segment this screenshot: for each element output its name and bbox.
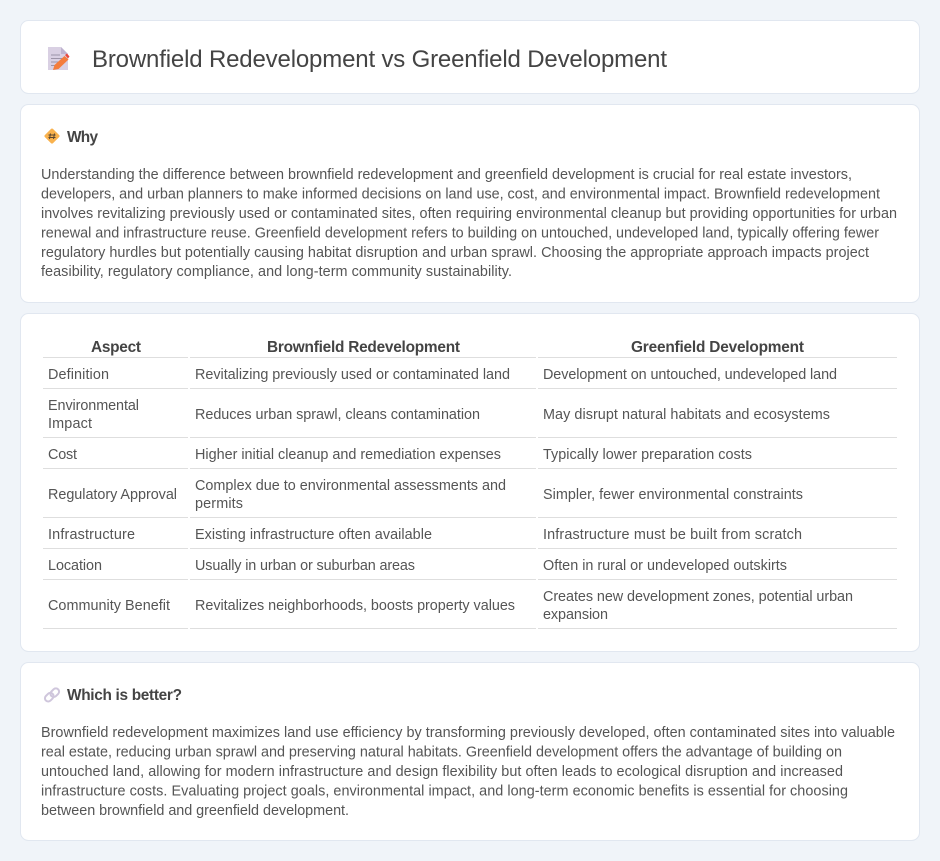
row: environmental impact: Impact <box>48 416 92 432</box>
table header <box>91 339 804 356</box>
row: community benefit <box>48 589 853 623</box>
text block: why paragraph: involves revitalizing previously used or contaminated sites, often requiring environmental cleanup but providing opportunities for urban <box>41 206 897 222</box>
panel: why <box>20 104 920 302</box>
row: infrastructure <box>48 527 802 543</box>
row: cost: Typically lower preparation costs <box>543 447 752 463</box>
row: regulatory approval: Complex due to environmental assessments and <box>195 478 506 494</box>
text block: why paragraph: Understanding the difference between brownfield redevelopment and greenfield development is crucial for real estate investors, <box>41 167 852 183</box>
row: location: Location <box>48 558 102 574</box>
row: definition: Definition <box>48 367 109 383</box>
heading: why: Why <box>67 129 98 146</box>
row: cost: Higher initial cleanup and remediation expenses <box>195 447 501 463</box>
text block: which is better paragraph: untouched land, allowing for modern infrastructure and design flexibility but often leads to ecological disruption and increased <box>41 764 843 780</box>
row: environmental impact: Environmental <box>48 398 139 414</box>
row: community benefit: Community Benefit <box>48 598 170 614</box>
text block: which is better paragraph: infrastructure costs. Evaluating project goals, environmental impact, and long-term economic benefits is essential for choosing <box>41 784 848 800</box>
row: environmental impact <box>48 398 830 432</box>
text block: which is better paragraph: between brownfield and greenfield development. <box>41 803 349 819</box>
text block: why paragraph: renewal and infrastructure reuse. Greenfield development refers to building on untouched, undeveloped land, typically offering fewer <box>41 226 879 242</box>
heading: which is better: Which is better? <box>67 687 182 704</box>
row: environmental impact: Reduces urban sprawl, cleans contamination <box>195 407 480 423</box>
row: community benefit: expansion <box>543 607 608 623</box>
row: regulatory approval: permits <box>195 496 243 512</box>
text block: which is better paragraph: Brownfield redevelopment maximizes land use efficiency by transforming previously developed, often contaminated sites into valuable <box>41 725 895 741</box>
title: Brownfield Redevelopment vs Greenfield Development <box>92 46 667 73</box>
row: community benefit: Revitalizes neighborhoods, boosts property values <box>195 598 515 614</box>
table header: Greenfield Development <box>631 339 804 356</box>
icon: link <box>44 687 60 703</box>
row: infrastructure: Infrastructure must be built from scratch <box>543 527 802 543</box>
row: definition: Revitalizing previously used or contaminated land <box>195 367 510 383</box>
row: infrastructure: Infrastructure <box>48 527 135 543</box>
icon: document with pencil <box>48 47 70 70</box>
row: location <box>48 558 787 574</box>
row: community benefit: Creates new development zones, potential urban <box>543 589 853 605</box>
icon: construction diamond <box>44 128 60 144</box>
panel: which is better <box>20 662 920 840</box>
row: environmental impact: May disrupt natural habitats and ecosystems <box>543 407 830 423</box>
row: location: Often in rural or undeveloped outskirts <box>543 558 787 574</box>
row: cost <box>48 447 752 463</box>
row: location: Usually in urban or suburban areas <box>195 558 415 574</box>
text block: which is better paragraph: real estate, reducing urban sprawl and preserving natural habitats. Greenfield development offers the advantage of building on <box>41 744 842 760</box>
row: regulatory approval: Simpler, fewer environmental constraints <box>543 487 803 503</box>
text block: which is better paragraph <box>41 725 895 819</box>
table header: Aspect <box>91 339 141 356</box>
row: cost: Cost <box>48 447 77 463</box>
panel: comparison table <box>20 314 920 652</box>
text block: why paragraph <box>41 167 897 280</box>
row: regulatory approval <box>48 478 803 512</box>
row: definition <box>48 367 837 383</box>
row: definition: Development on untouched, undeveloped land <box>543 367 837 383</box>
text block: why paragraph: regulatory hurdles but potentially causing habitat disruption and urban sprawl. Choosing the appropriate approach impacts project <box>41 245 869 261</box>
text block: why paragraph: feasibility, regulatory compliance, and long-term community sustainability. <box>41 264 512 280</box>
table rules <box>43 358 897 628</box>
row: infrastructure: Existing infrastructure often available <box>195 527 432 543</box>
panel: title card <box>20 20 920 94</box>
text block: why paragraph: developers, and urban planners to make informed decisions on land use, cost, and environmental impact. Brownfield redevelopment <box>41 186 880 202</box>
row: regulatory approval: Regulatory Approval <box>48 487 177 503</box>
table header: Brownfield Redevelopment <box>267 339 460 356</box>
